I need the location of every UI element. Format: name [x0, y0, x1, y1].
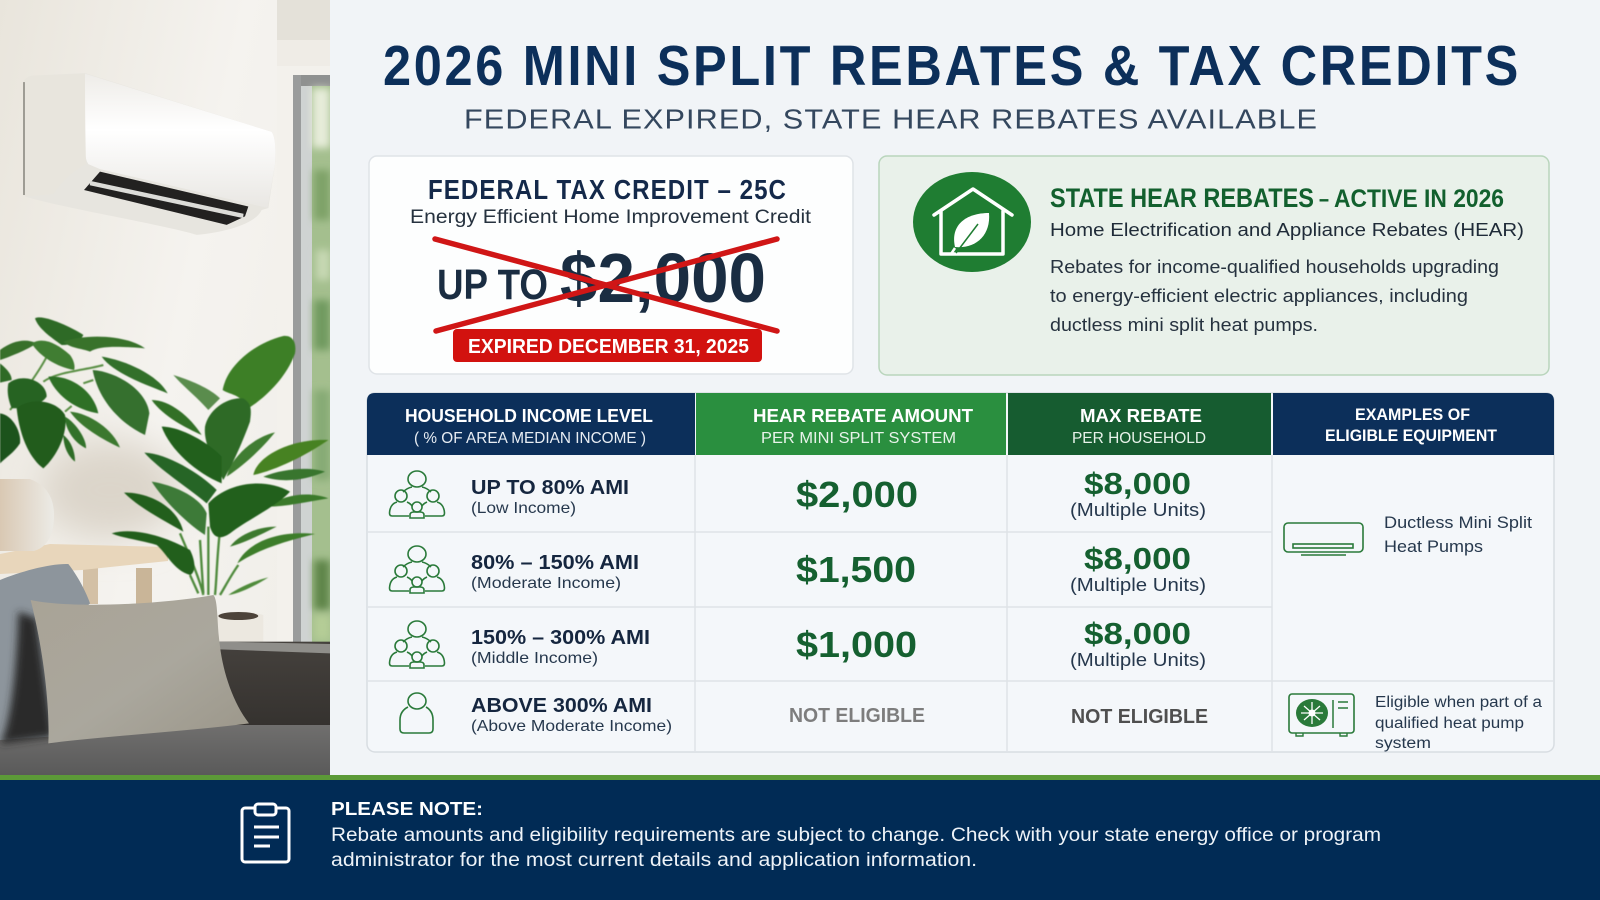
row 3: 150% to 300% AMI: (Multiple Units) [1070, 649, 1206, 670]
header: examples of eligible equipment [1273, 393, 1554, 455]
heading: federal tax credit: FEDERAL TAX CREDIT – 25C [428, 174, 787, 205]
equipment: ductless mini split: Heat Pumps [1384, 537, 1483, 556]
icon: outdoor unit [1289, 694, 1354, 736]
row 4: above 300% AMI [400, 693, 1208, 735]
row 2: 80% to 150% AMI: (Multiple Units) [1070, 574, 1206, 595]
header: household income level: ( % OF AREA MEDIAN INCOME ) [414, 430, 646, 447]
header: examples of eligible equipment: EXAMPLES OF [1355, 405, 1470, 424]
right plant [112, 336, 328, 595]
icon: family group [390, 471, 444, 518]
row 2: 80% to 150% AMI: 80% – 150% AMI [471, 552, 639, 574]
icon: family group [390, 621, 444, 668]
row 3: 150% to 300% AMI [390, 616, 1206, 670]
row 2: 80% to 150% AMI: (Moderate Income) [471, 575, 621, 592]
row 4: above 300% AMI: NOT ELIGIBLE [789, 705, 925, 727]
heading: state HEAR rebates: ACTIVE IN 2026 [1334, 185, 1504, 213]
icon: family group [390, 546, 444, 593]
row 1: up to 80% AMI [390, 466, 1206, 520]
note text: administrator for the most current details and application information. [331, 850, 977, 871]
row 4: above 300% AMI: (Above Moderate Income) [471, 718, 672, 735]
subheading: Home Electrification and Appliance Rebates (HEAR) [1050, 220, 1524, 240]
body text: Rebates for income-qualified households upgrading [1050, 257, 1499, 277]
panel: federal tax credit [369, 156, 853, 374]
sofa, pot and cushions [0, 564, 332, 775]
header: household income level [367, 393, 695, 455]
icon: indoor unit [1284, 523, 1363, 555]
equipment: outdoor heat pump [1289, 694, 1542, 752]
header: max rebate: PER HOUSEHOLD [1072, 430, 1206, 447]
icon: clipboard [242, 804, 289, 862]
row 3: 150% to 300% AMI: 150% – 300% AMI [471, 627, 650, 649]
row 3: 150% to 300% AMI: $8,000 [1084, 616, 1191, 651]
row 1: up to 80% AMI: $2,000 [796, 474, 918, 515]
row 3: 150% to 300% AMI: $1,000 [796, 624, 917, 665]
row 2: 80% to 150% AMI: $8,000 [1084, 541, 1191, 576]
row 4: above 300% AMI: NOT ELIGIBLE [1071, 706, 1208, 728]
expired badge: EXPIRED DECEMBER 31, 2025 [468, 336, 749, 358]
body text [1050, 257, 1499, 335]
rebate table [367, 393, 1554, 752]
equipment: ductless mini split [1284, 513, 1532, 556]
header: HEAR rebate amount: PER MINI SPLIT SYSTEM [761, 430, 956, 447]
footer note band [0, 775, 1600, 900]
header: household income level: HOUSEHOLD INCOME LEVEL [405, 406, 653, 426]
equipment: ductless mini split: Ductless Mini Split [1384, 513, 1532, 532]
row 2: 80% to 150% AMI [390, 541, 1206, 595]
row 2: 80% to 150% AMI: $1,500 [796, 549, 916, 590]
header: examples of eligible equipment: ELIGIBLE EQUIPMENT [1325, 426, 1498, 445]
amount value: $2,000 [560, 239, 766, 317]
heading: state HEAR rebates: STATE HEAR REBATES [1050, 183, 1314, 213]
header: max rebate [1008, 393, 1271, 455]
amount up to: UP TO [437, 261, 548, 309]
row 1: up to 80% AMI: (Multiple Units) [1070, 499, 1206, 520]
panel: state HEAR rebates [879, 156, 1549, 375]
note text [331, 825, 1381, 871]
row 1: up to 80% AMI: UP TO 80% AMI [471, 477, 629, 499]
table and vase [0, 479, 168, 604]
subheading: Energy Efficient Home Improvement Credit [410, 207, 812, 228]
row 1: up to 80% AMI: (Low Income) [471, 500, 576, 517]
note text: Rebate amounts and eligibility requirements are subject to change. Check with your state energy office or program [331, 825, 1381, 846]
heading: state HEAR rebates: – [1319, 186, 1329, 213]
header: HEAR rebate amount: HEAR REBATE AMOUNT [753, 406, 973, 426]
heading: state HEAR rebates [1050, 183, 1504, 213]
note heading: PLEASE NOTE: [331, 799, 483, 819]
icon: single person [400, 693, 433, 733]
row 3: 150% to 300% AMI: (Middle Income) [471, 650, 598, 667]
body text: to energy-efficient electric appliances, including [1050, 286, 1468, 306]
header: max rebate: MAX REBATE [1080, 406, 1202, 426]
wall mounted mini split unit [23, 73, 275, 235]
photo: living room with wall mounted mini split [0, 0, 332, 775]
expired badge [453, 329, 762, 362]
icon: house with leaf [913, 172, 1031, 272]
equipment: outdoor heat pump: system [1375, 735, 1431, 752]
row 1: up to 80% AMI: $8,000 [1084, 466, 1191, 501]
body text: ductless mini split heat pumps. [1050, 315, 1318, 335]
table body [367, 393, 1554, 752]
header: HEAR rebate amount [696, 393, 1006, 455]
subtitle: FEDERAL EXPIRED, STATE HEAR REBATES AVAILABLE [464, 104, 1318, 134]
left plant [0, 317, 168, 468]
red cross-out [435, 239, 777, 331]
equipment: outdoor heat pump: qualified heat pump [1375, 715, 1524, 732]
window with garden view [277, 0, 330, 646]
equipment: outdoor heat pump: Eligible when part of a [1375, 694, 1542, 711]
row 4: above 300% AMI: ABOVE 300% AMI [471, 695, 652, 717]
